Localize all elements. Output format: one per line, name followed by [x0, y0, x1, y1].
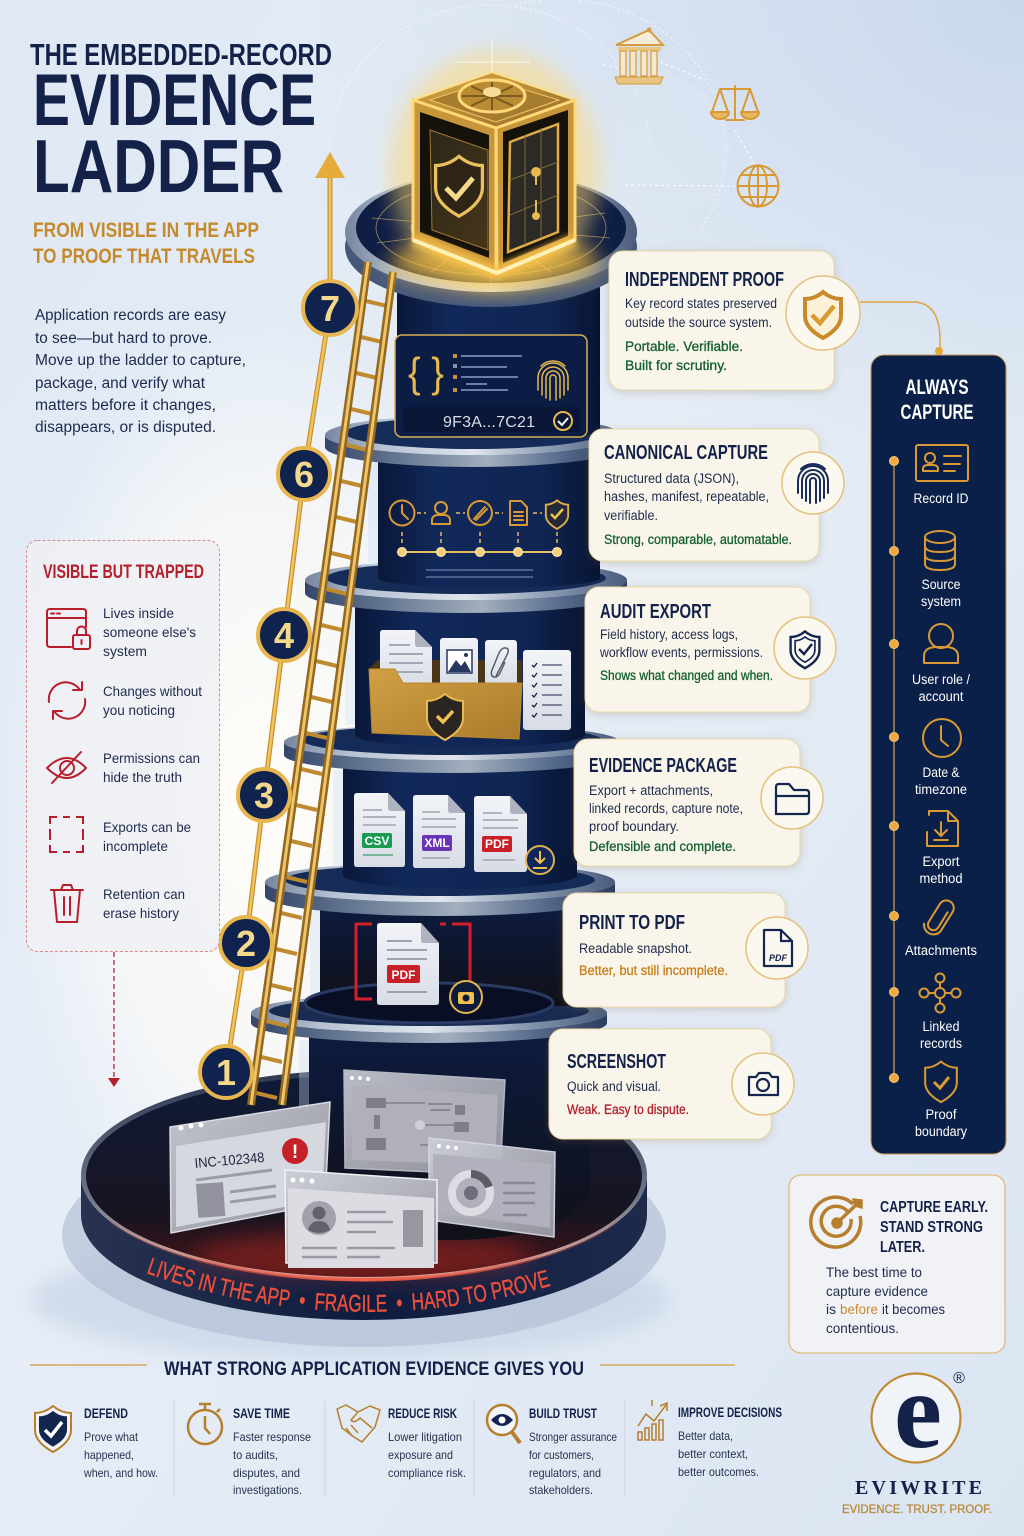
card: evidence package: Export + attachments,: [589, 783, 713, 798]
logo: eviwrite: e: [894, 1352, 942, 1471]
csv file: CSV: [365, 834, 389, 848]
item: attachments: Attachments: [905, 943, 977, 958]
window: incident record: [170, 1102, 330, 1233]
card: evidence package: proof boundary.: [589, 819, 679, 834]
intro paragraph: to see—but hard to prove.: [35, 330, 212, 347]
item: permissions: hide the truth: [103, 769, 182, 785]
step badge 2: [220, 917, 272, 969]
item: retention: erase history: [103, 905, 179, 921]
icon: globe: [738, 165, 778, 207]
panel: visible but trapped: [26, 540, 220, 952]
item: proof boundary: Proof: [926, 1107, 957, 1122]
benefit: defend: happened,: [84, 1448, 134, 1462]
step badge 4: [258, 609, 310, 661]
callout: capture early: LATER.: [880, 1239, 925, 1256]
column 6: [397, 285, 600, 440]
benefit: save time: SAVE TIME: [233, 1405, 290, 1421]
benefit: defend: when, and how.: [83, 1466, 158, 1480]
benefit: build trust: for customers,: [529, 1448, 594, 1462]
level 2 pdf snapshot: PDF: [392, 968, 416, 982]
item: changes: you noticing: [103, 702, 175, 718]
step badge 7: [303, 281, 357, 335]
level 6 hash card: [395, 335, 587, 437]
card: audit export: Shows what changed and when.: [600, 668, 773, 683]
pdf file: PDF: [485, 837, 509, 851]
callout: capture early: CAPTURE EARLY.: [880, 1199, 988, 1216]
benefit: defend: [35, 1405, 158, 1480]
card: screenshot: Weak. Easy to dispute.: [567, 1102, 689, 1117]
benefit: reduce risk: REDUCE RISK: [388, 1405, 457, 1421]
card: screenshot: SCREENSHOT: [567, 1051, 666, 1073]
window: dashboard: [429, 1138, 555, 1237]
evidence tower: [62, 182, 666, 1347]
title: THE EMBEDDED-RECORD: [30, 37, 332, 72]
item: attachments: [905, 896, 977, 958]
document icon: [510, 501, 527, 525]
item: date timezone: Date &: [922, 765, 960, 780]
callout: capture early: capture evidence: [826, 1283, 928, 1299]
paperclip card: [485, 640, 517, 688]
item: proof boundary: [915, 1062, 967, 1139]
step number line and arrow: [226, 152, 345, 1072]
card: independent proof: [609, 251, 860, 390]
card: print to pdf: [563, 893, 808, 1007]
card: independent proof: Key record states preserved: [625, 296, 777, 311]
level 6 hash card: 9F3A...7C21: [443, 414, 535, 431]
item: date timezone: timezone: [915, 782, 967, 797]
platform 5: [305, 560, 627, 613]
icon: folder: [761, 767, 823, 829]
arrow: trapped down to base: [108, 952, 120, 1087]
item: linked records: records: [920, 1036, 962, 1051]
benefit: improve decisions: Better data,: [678, 1429, 733, 1443]
benefit: improve decisions: better outcomes.: [678, 1465, 759, 1479]
authority icons: [601, 28, 778, 207]
panel: always capture: ALWAYS: [906, 376, 968, 399]
level 2 pdf snapshot: [305, 923, 553, 1023]
step badge 3: [238, 769, 290, 821]
panel: visible but trapped: VISIBLE BUT TRAPPED: [43, 562, 204, 583]
benefit: save time: to audits,: [233, 1448, 278, 1462]
title: [30, 37, 332, 208]
panel: always capture: CAPTURE: [900, 401, 974, 424]
item: exports: incomplete: [103, 838, 168, 854]
item: linked records: Linked: [922, 1019, 960, 1034]
logo: eviwrite: ®: [953, 1370, 965, 1387]
icon: courthouse: [615, 28, 663, 84]
callout: capture early: The best time to: [826, 1264, 922, 1280]
step badge 4: 4: [274, 615, 294, 656]
item: exports: Exports can be: [103, 819, 191, 835]
platform 3: [265, 862, 615, 916]
column 5: [378, 455, 600, 588]
benefit: save time: disputes, and: [233, 1466, 300, 1480]
intro paragraph: Move up the ladder to capture,: [35, 352, 246, 369]
benefit: defend: Prove what: [84, 1430, 139, 1444]
callout: capture early: [789, 1175, 1005, 1353]
benefit: save time: Faster response: [233, 1430, 311, 1444]
item: retention: [51, 885, 185, 922]
item: export method: [920, 811, 962, 886]
logo: eviwrite: EVIWRITE: [855, 1477, 982, 1499]
item: proof boundary: boundary: [915, 1124, 967, 1139]
item: source system: [921, 531, 961, 609]
shield icon: [546, 500, 568, 529]
item: export method: Export: [922, 854, 960, 869]
card: print to pdf: Readable snapshot.: [579, 941, 692, 956]
item: date timezone: [915, 719, 967, 797]
step badge 6: [278, 448, 330, 500]
benefit: build trust: [487, 1405, 617, 1497]
window: incident record: !: [292, 1142, 298, 1163]
card: audit export: AUDIT EXPORT: [600, 601, 711, 623]
card: audit export: [585, 587, 836, 712]
column 3: [343, 765, 577, 889]
card: print to pdf: Better, but still incomplete.: [579, 963, 728, 978]
checklist: [523, 650, 571, 730]
platform 4: [284, 724, 620, 773]
card: audit export: workflow events, permissions.: [599, 645, 763, 660]
card: independent proof: outside the source system.: [625, 315, 772, 330]
icon: pdf document: [746, 917, 808, 979]
panel: always capture: [871, 355, 1006, 1154]
icon: pdf document: PDF: [769, 953, 788, 963]
window: person: [285, 1170, 437, 1268]
item: someone else's system: Lives inside: [103, 605, 174, 621]
level 4 evidence folder: [369, 630, 571, 740]
column 4: [355, 605, 585, 747]
document: [380, 630, 432, 690]
benefit: defend: DEFEND: [84, 1405, 128, 1421]
callout: capture early: contentious.: [826, 1320, 899, 1336]
base slogan: LIVES IN THE APP • FRAGILE • HARD TO PROVE: [147, 1258, 551, 1312]
item: user role: [912, 624, 970, 704]
user icon: [432, 502, 450, 524]
card: screenshot: Quick and visual.: [567, 1079, 661, 1094]
benefit: save time: investigations.: [233, 1483, 302, 1497]
card: independent proof: Built for scrutiny.: [625, 358, 727, 373]
item: record id: Record ID: [914, 491, 969, 506]
benefit: save time: [188, 1404, 311, 1497]
benefit: reduce risk: [337, 1405, 466, 1480]
top face: [413, 72, 575, 128]
connector to always capture: [860, 302, 943, 355]
level 5 audit timeline: [390, 500, 568, 577]
icon: camera: [732, 1053, 794, 1115]
benefit: reduce risk: exposure and: [388, 1448, 453, 1462]
item: someone else's system: someone else's: [103, 624, 196, 640]
item: record id: [914, 445, 969, 506]
window: workflow: [344, 1070, 505, 1175]
item: linked records: [920, 974, 962, 1051]
item: exports: [50, 817, 191, 854]
intro paragraph: disappears, or is disputed.: [35, 419, 216, 436]
item: someone else's system: system: [103, 643, 147, 659]
column 2: [320, 905, 595, 1006]
item: source system: Source: [922, 577, 960, 592]
clock icon: [390, 500, 414, 526]
callout: capture early: it becomes: [882, 1301, 945, 1317]
card: canonical capture: Structured data (JSON),: [604, 471, 739, 486]
right face door: [496, 100, 575, 273]
icon: gold shield: [786, 276, 860, 350]
subtitle: TO PROOF THAT TRAVELS: [33, 245, 255, 268]
title: LADDER: [33, 124, 284, 208]
item: permissions: [47, 750, 200, 785]
base platform: [62, 1070, 666, 1347]
item: source system: system: [921, 594, 961, 609]
intro paragraph: matters before it changes,: [35, 397, 216, 414]
level 6 hash card: { }: [408, 349, 444, 396]
card: audit export: Field history, access logs,: [600, 627, 738, 642]
callout: capture early: before: [840, 1301, 878, 1317]
xml file: [413, 795, 465, 868]
card: canonical capture: [589, 429, 844, 561]
item: changes: Changes without: [103, 683, 202, 699]
csv file: [354, 793, 405, 867]
card: independent proof: INDEPENDENT PROOF: [625, 269, 784, 291]
intro paragraph: package, and verify what: [35, 375, 206, 392]
level 3 export files: [354, 793, 554, 874]
step badge 1: [200, 1046, 252, 1098]
secure vault: [390, 40, 600, 290]
logo: eviwrite: [842, 1352, 992, 1516]
item: retention: Retention can: [103, 886, 185, 902]
card: evidence package: Defensible and complete.: [589, 839, 736, 854]
window: incident record: INC-102348: [194, 1149, 265, 1171]
card: evidence package: linked records, capture note,: [589, 801, 743, 816]
folder body: [369, 669, 522, 739]
logo: eviwrite: EVIDENCE. TRUST. PROOF.: [842, 1502, 992, 1516]
intro paragraph: [35, 307, 246, 436]
icon: scales: [711, 86, 759, 120]
folder shield: [427, 694, 463, 740]
step badge 7: 7: [320, 288, 340, 329]
card: canonical capture: Strong, comparable, automatable.: [604, 532, 792, 547]
xml file: XML: [424, 836, 450, 850]
card: canonical capture: CANONICAL CAPTURE: [604, 442, 768, 464]
benefit: improve decisions: [638, 1400, 782, 1479]
card: evidence package: EVIDENCE PACKAGE: [589, 755, 737, 777]
card: independent proof: Portable. Verifiable.: [625, 339, 743, 354]
benefit: reduce risk: Lower litigation: [388, 1430, 462, 1444]
left face: [413, 100, 496, 273]
title: EVIDENCE: [33, 60, 316, 141]
callout: capture early: is: [826, 1301, 836, 1317]
item: user role: User role /: [912, 672, 970, 687]
icon: fingerprint: [782, 452, 844, 514]
card: print to pdf: PRINT TO PDF: [579, 912, 685, 934]
benefit: build trust: stakeholders.: [529, 1483, 593, 1497]
item: changes: [49, 682, 202, 719]
item: someone else's system: [47, 605, 196, 659]
step badge 1: 1: [216, 1052, 236, 1093]
subtitle: [33, 219, 259, 268]
pen icon: [468, 501, 492, 525]
subtitle: FROM VISIBLE IN THE APP: [33, 219, 259, 242]
item: user role: account: [918, 689, 964, 704]
ladder: [251, 262, 393, 1105]
platform 7: [345, 172, 637, 307]
download badge: [526, 846, 554, 874]
item: permissions: Permissions can: [103, 750, 200, 766]
card: canonical capture: hashes, manifest, repeatable,: [604, 489, 769, 504]
icon: target: [811, 1197, 862, 1247]
card: canonical capture: verifiable.: [604, 508, 658, 523]
card: evidence package: [574, 739, 823, 866]
platform 6: [325, 415, 621, 467]
image card: [440, 638, 478, 688]
benefit: build trust: regulators, and: [529, 1466, 601, 1480]
benefit: build trust: Stronger assurance: [529, 1430, 617, 1444]
benefit: improve decisions: better context,: [678, 1447, 748, 1461]
benefit: reduce risk: compliance risk.: [388, 1466, 466, 1480]
benefit: build trust: BUILD TRUST: [529, 1405, 597, 1421]
callout: capture early: STAND STRONG: [880, 1219, 983, 1236]
step badge 6: 6: [294, 454, 314, 495]
pdf file: [474, 796, 527, 872]
intro paragraph: Application records are easy: [35, 307, 226, 324]
step badge 3: 3: [254, 775, 274, 816]
column 1: [309, 1030, 590, 1240]
benefit: improve decisions: IMPROVE DECISIONS: [678, 1404, 782, 1420]
icon: navy shield: [774, 617, 836, 679]
platform 2: [251, 993, 607, 1043]
benefits heading: WHAT STRONG APPLICATION EVIDENCE GIVES YOU: [164, 1359, 584, 1380]
item: export method: method: [920, 871, 962, 886]
card: screenshot: [549, 1029, 794, 1139]
step badge 2: 2: [236, 923, 256, 964]
